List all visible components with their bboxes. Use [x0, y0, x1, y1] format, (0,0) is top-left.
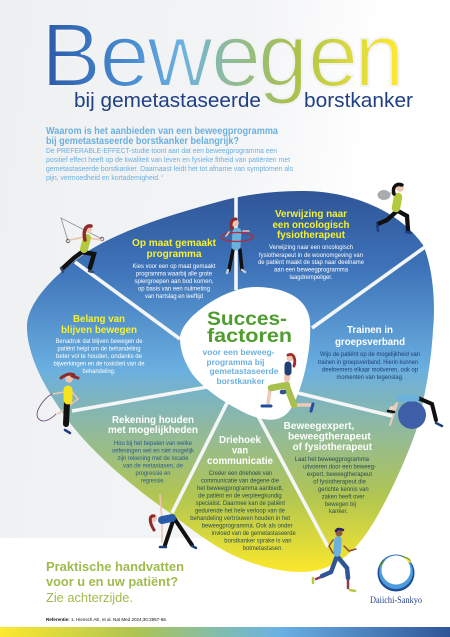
intro text block: positief effect heeft op de kwaliteit van leven en fysieke fitheid van patiënten met — [46, 157, 290, 164]
icon: figure with resistance cables — [61, 218, 104, 272]
centre heading: Succes- — [207, 308, 287, 330]
intro text block: bij gemetastaseerde borstkanker belangrijk? — [46, 136, 239, 147]
panel: beweegexpert: beweegtherapeut — [288, 432, 372, 442]
panel: beweegexpert: of fysiotherapeut — [293, 442, 373, 453]
centre subheading: programma bij — [206, 357, 264, 367]
centre subheading: borstkanker — [216, 376, 265, 386]
call to action: voor u en uw patiënt? — [46, 575, 178, 589]
panel: beweegexpert: uitvoeren door een beweeg- — [303, 464, 376, 470]
panel: belang van blijven bewegen — [54, 314, 145, 375]
success factor blob — [27, 191, 434, 572]
panel: driehoek van communicatie: communicatie — [207, 456, 274, 467]
panel: rekening houden met mogelijkheden: oefeningen wel en niet mogelijk — [112, 448, 195, 454]
panel: beweegexpert: kanker. — [329, 508, 348, 515]
panel: driehoek van communicatie: specialist. Daarmee kan de patiënt — [196, 500, 285, 507]
panel: driehoek van communicatie: van — [232, 446, 248, 456]
icon: figure with weight — [377, 184, 411, 233]
panel: rekening houden met mogelijkheden: Hou bij het bepalen van welke — [114, 440, 192, 447]
icon: figure with skipping rope — [37, 374, 78, 433]
panel: beweegexpert: of fysiotherapeut die — [313, 478, 366, 486]
panel: verwijzing naar oncologisch fysiotherapeut: fysiotherapeut — [277, 230, 346, 241]
reference: Referentie: 1. Hiensch AE, et al. Nat Med 2024;30:2957-68. — [46, 617, 167, 622]
intro text block: pijn, vermoedheid en kortademigheid. — [46, 175, 160, 182]
call to action — [46, 560, 184, 605]
panel: op maat gemaakt programma: programma — [146, 249, 202, 260]
centre heading — [207, 308, 292, 347]
panel: driehoek van communicatie: behandeling vertrouwen houden in het — [190, 515, 290, 522]
panel: belang van blijven bewegen: behandeling. — [82, 368, 116, 375]
panel: verwijzing naar oncologisch fysiotherapeut: fysiotherapeut in de woonomgeving van — [259, 252, 363, 259]
panel: driehoek van communicatie: Driehoek — [219, 435, 262, 446]
panel: beweegexpert: expert, beweegtherapeut — [307, 471, 372, 478]
panel: belang van blijven bewegen: blijven bewegen — [61, 325, 137, 336]
call to action: Praktische handvatten — [46, 560, 184, 574]
subtitle: bij gemetastaseerde — [74, 89, 261, 112]
intro text block: De PREFERABLE-EFFECT-studie toont aan dat een beweegprogramma een — [46, 148, 277, 155]
panel: driehoek van communicatie: borstkanker sprake is van — [224, 538, 292, 544]
intro text block: gemetastaseerde borstkanker. Daarnaast leidt het tot afname van symptomen als — [46, 166, 294, 173]
intro text block: Waarom is het aanbieden van een beweegprogramma — [46, 126, 278, 137]
bottom colour bar — [0, 627, 450, 637]
panel: belang van blijven bewegen: Benadruk dat blijven bewegen de — [56, 338, 143, 345]
panel: trainen in groepsverband: Wijs de patiënt op de mogelijkheid van — [320, 351, 420, 358]
panel: op maat gemaakt programma: Op maat gemaakt — [132, 238, 217, 249]
panel: trainen in groepsverband — [318, 325, 420, 381]
panel: driehoek van communicatie: de patiënt en de verpleegkundig — [198, 492, 282, 500]
panel: belang van blijven bewegen: patiënt helpt om de behandeling — [58, 346, 141, 352]
panel: verwijzing naar oncologisch fysiotherapeut: Verwijzing naar een oncologisch — [269, 244, 353, 251]
icon: lunge figure — [262, 354, 313, 411]
panel: op maat gemaakt programma — [132, 238, 217, 300]
icon: runner — [313, 529, 356, 591]
panel: verwijzing naar oncologisch fysiotherapeut — [258, 209, 364, 281]
panel: verwijzing naar oncologisch fysiotherapeut: een oncologisch — [272, 220, 350, 231]
panel: driehoek van communicatie: invloed van de gemetastaseerde — [212, 530, 296, 537]
panel: driehoek van communicatie: Creëer een driehoek van — [209, 470, 272, 477]
panel: belang van blijven bewegen: bijwerkingen en de toxiciteit van de — [54, 360, 145, 368]
panel: driehoek van communicatie: het beweegprogramma aanbiedt, — [197, 485, 284, 492]
panel: trainen in groepsverband: momenten van tegenslag. — [336, 374, 404, 381]
panel: driehoek van communicatie: gedurende het hele verloop van de — [195, 508, 285, 514]
panel: beweegexpert: bewegen bij — [325, 501, 356, 508]
icon: figure on exercise ball — [388, 398, 442, 429]
panel: rekening houden met mogelijkheden: regressie. — [141, 478, 165, 484]
panel: op maat gemaakt programma: op basis van een nulmeting — [138, 286, 210, 292]
panel: trainen in groepsverband: groepsverband — [335, 337, 405, 348]
logo: Daiichi-Sankyo — [370, 554, 422, 605]
panel: rekening houden met mogelijkheden: met mogelijkheden — [108, 425, 198, 436]
panel: driehoek van communicatie — [190, 435, 296, 552]
panel: beweegexpert: Beweegexpert, — [284, 421, 355, 432]
panel: driehoek van communicatie: beweegprogramma. Ook als onder — [202, 522, 293, 530]
panel: op maat gemaakt programma: spiergroepen aan bod komen, — [134, 278, 214, 285]
panel: beweegexpert: zaken heeft over — [322, 494, 364, 500]
panel: rekening houden met mogelijkheden — [108, 415, 198, 484]
centre subheading — [202, 347, 279, 386]
centre subheading: voor een beweeg- — [202, 347, 275, 357]
call to action: Zie achterzijde. — [46, 591, 133, 605]
panel: op maat gemaakt programma: van hartslag en leeftijd — [145, 293, 203, 300]
panel: rekening houden met mogelijkheden: zijn rekening met de locatie — [118, 455, 189, 462]
panel: verwijzing naar oncologisch fysiotherapeut: de patiënt maakt de stap naar deelname — [258, 259, 364, 266]
panel: trainen in groepsverband: deelnemers elkaar motiveren, ook op — [322, 366, 418, 374]
panel: op maat gemaakt programma: Kies voor een op maat gemaakt — [132, 263, 216, 270]
panel: rekening houden met mogelijkheden: van de metastasen, de — [123, 462, 183, 470]
icon: figure with hula hoop — [221, 219, 253, 273]
panel: trainen in groepsverband: Trainen in — [347, 325, 393, 336]
subtitle — [74, 89, 413, 112]
panel: op maat gemaakt programma: programma waarbij alle grote — [136, 270, 212, 278]
panel: verwijzing naar oncologisch fysiotherapeut: aan een beweegprogramma — [274, 266, 348, 274]
centre white shape — [180, 287, 310, 420]
panel: beweegexpert — [284, 421, 376, 515]
panel: trainen in groepsverband: trainen in groepsverband. Hierin kunnen — [318, 359, 418, 366]
icon: side stretch figure — [149, 495, 196, 548]
panel: verwijzing naar oncologisch fysiotherapeut: laagdrempeliger. — [290, 274, 333, 281]
blob dividers — [72, 192, 425, 547]
panel: beweegexpert: gerichte kennis van — [318, 486, 369, 493]
panel: rekening houden met mogelijkheden: progressie en — [136, 470, 171, 477]
centre heading: factoren — [207, 325, 292, 347]
panel: belang van blijven bewegen: Belang van — [73, 314, 125, 325]
centre subheading: gemetastaseerde — [210, 366, 279, 376]
title: Bewegen — [41, 6, 405, 106]
logo: Daiichi-Sankyo: Daiichi-Sankyo — [370, 595, 422, 605]
panel: driehoek van communicatie: communicatie van degene die — [201, 478, 279, 484]
panel: driehoek van communicatie: botmetastasen. — [243, 545, 283, 552]
subtitle: borstkanker — [304, 89, 413, 112]
panel: rekening houden met mogelijkheden: Rekening houden — [112, 415, 194, 426]
intro text block: 1 — [161, 173, 164, 178]
intro text block — [46, 126, 294, 182]
panel: belang van blijven bewegen: beter vol te houden, ondanks de — [56, 353, 142, 360]
panel: beweegexpert: Laat het beweegprogramma — [295, 456, 369, 463]
panel: verwijzing naar oncologisch fysiotherapeut: Verwijzing naar — [275, 209, 347, 220]
